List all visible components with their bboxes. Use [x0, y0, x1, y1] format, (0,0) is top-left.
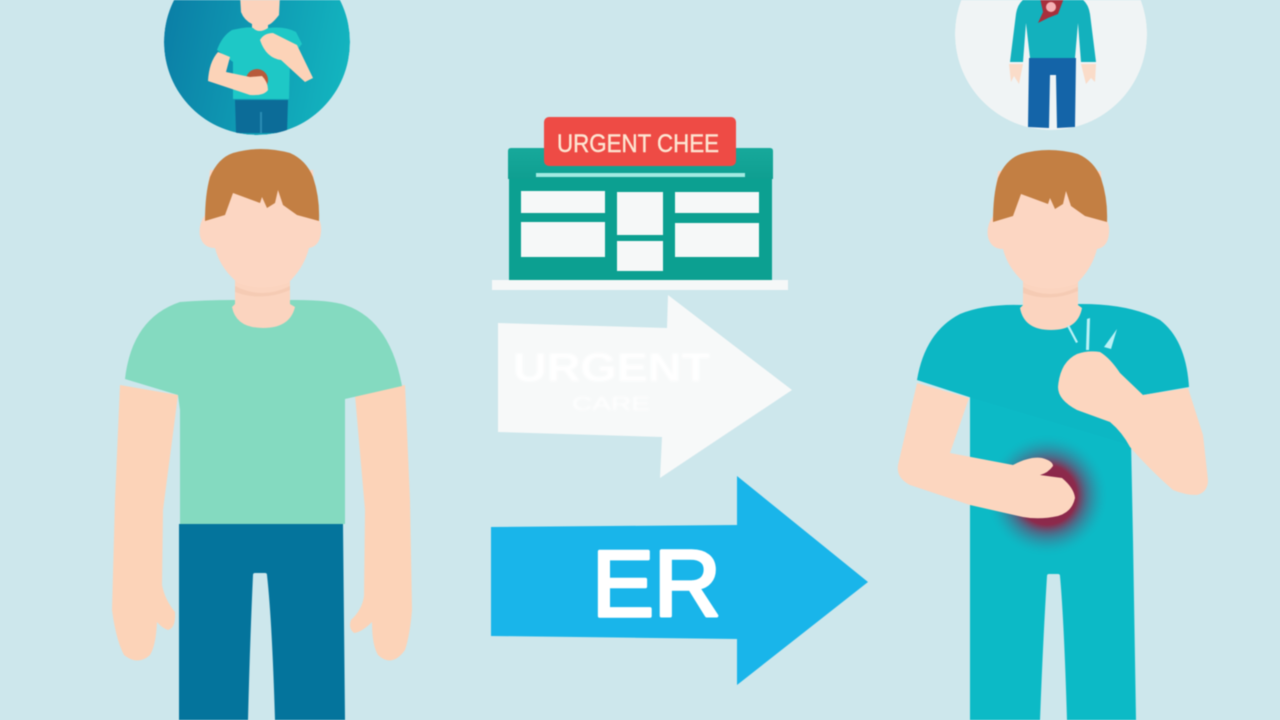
stomach pain glow	[996, 440, 1102, 550]
green t-shirt	[125, 300, 402, 524]
arrow label	[513, 346, 710, 414]
left person	[112, 149, 412, 720]
left trousers	[179, 524, 345, 720]
teal t-shirt	[917, 304, 1189, 445]
arrow label: CARE	[572, 394, 650, 414]
blue ER arrow	[491, 476, 868, 685]
right person	[898, 150, 1208, 720]
head and neck	[232, 276, 295, 328]
urgent care building	[492, 117, 788, 290]
pavement	[492, 280, 788, 290]
building body	[509, 178, 772, 280]
hair	[205, 149, 319, 221]
teal body and trousers	[970, 390, 1136, 720]
left arm	[112, 385, 178, 660]
windows	[521, 191, 759, 271]
ER label: ER	[592, 531, 721, 636]
roof line	[536, 173, 745, 177]
arm on stomach	[898, 383, 1075, 518]
hair	[993, 150, 1107, 222]
right arm	[350, 385, 412, 660]
icon: right circle with person holding chest	[955, 0, 1147, 130]
sign	[544, 117, 736, 166]
white urgent care arrow	[498, 295, 792, 478]
chest pain marks	[1067, 318, 1117, 350]
arrow label: URGENT	[513, 346, 710, 390]
icon: left circle with person holding stomach	[164, 0, 350, 135]
neck and head	[1020, 277, 1082, 330]
roof band	[508, 148, 773, 179]
sign: URGENT CHEE	[557, 130, 719, 158]
arm on chest	[1058, 351, 1208, 495]
